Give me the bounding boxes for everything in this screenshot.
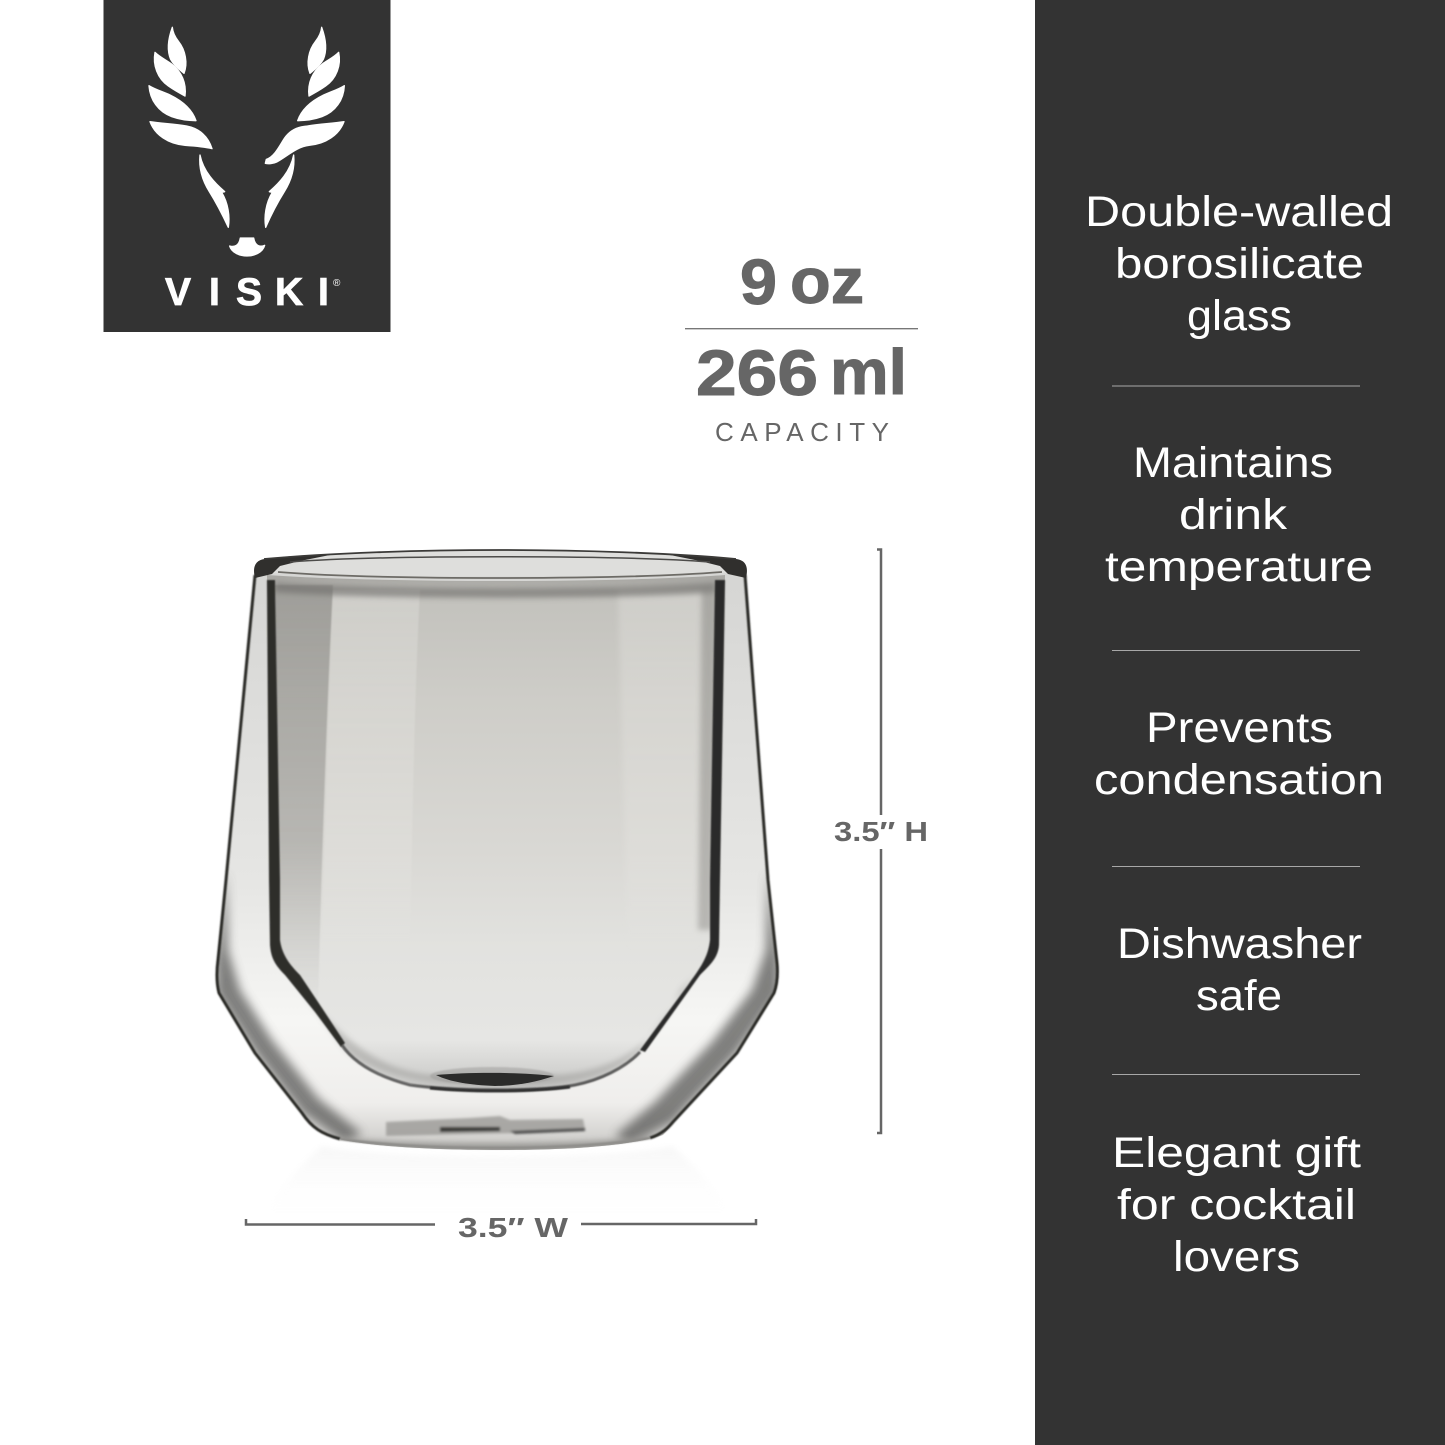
outer glass body	[216, 567, 778, 1150]
inner base dimple	[430, 1067, 554, 1086]
feature: temperature: drink	[1179, 491, 1288, 539]
feature: double-walled: glass	[1187, 292, 1292, 340]
height dimension	[834, 550, 928, 1133]
feature: condensation	[1094, 704, 1384, 804]
feature: temperature	[1105, 439, 1373, 591]
inner bottom dark centre	[430, 1087, 570, 1091]
dark inner wall right	[640, 580, 725, 1052]
outer left edge	[217, 575, 340, 1139]
feature: dishwasher	[1117, 920, 1362, 1020]
inner cup	[267, 575, 725, 1091]
glass reflection on the surface	[262, 1146, 735, 1225]
inner cup right light band	[618, 590, 702, 950]
icon: stag antlers and nose	[149, 27, 344, 256]
feature: gift: Elegant gift	[1112, 1129, 1361, 1177]
outer base mark	[386, 1116, 585, 1136]
capacity in millilitres: ml	[830, 336, 907, 408]
feature: gift: for cocktail	[1117, 1181, 1356, 1229]
feature: temperature: temperature	[1105, 543, 1373, 591]
logo: Viski badge	[104, 0, 390, 332]
dark inner wall left	[267, 580, 345, 1047]
base edge	[340, 1138, 650, 1148]
feature: condensation: Prevents	[1146, 704, 1333, 752]
soft edge shading on the lower walls	[216, 870, 779, 1150]
feature: double-walled: Double-walled	[1085, 188, 1393, 236]
inner cup light band	[322, 590, 420, 950]
inner cup right edge shade	[698, 590, 717, 930]
inner cup darker left band	[275, 585, 333, 1005]
width label: 3.5″ W	[458, 1212, 569, 1243]
rim	[254, 550, 747, 578]
capacity label: CAPACITY	[715, 417, 889, 447]
feature: dishwasher: safe	[1196, 972, 1282, 1020]
feature: double-walled: borosilicate	[1115, 240, 1364, 288]
outer right edge	[650, 575, 777, 1138]
capacity in ounces: oz	[790, 245, 864, 317]
capacity in ounces: 9	[740, 246, 777, 318]
product photo: double-walled smoke glass	[216, 550, 779, 1150]
capacity in millilitres: 266	[696, 337, 818, 409]
logo wordmark: VISKI	[165, 271, 329, 314]
feature: gift	[1112, 1129, 1361, 1281]
feature: dishwasher: Dishwasher	[1117, 920, 1362, 968]
width dimension	[246, 1212, 756, 1243]
lower cup translucent shading	[290, 975, 695, 1086]
capacity in millilitres	[696, 336, 907, 409]
height label: 3.5″ H	[834, 816, 928, 847]
shade under the rim	[275, 582, 716, 598]
logo: Viski badge: ®	[333, 278, 341, 289]
inner cup bottom curve	[342, 1045, 640, 1090]
feature: temperature: Maintains	[1133, 439, 1333, 487]
capacity in ounces	[740, 245, 864, 318]
feature: gift: lovers	[1173, 1233, 1300, 1281]
capacity block	[685, 245, 918, 447]
panel: features	[1035, 0, 1445, 1445]
feature: condensation: condensation	[1094, 756, 1384, 804]
feature: double-walled	[1085, 188, 1393, 340]
